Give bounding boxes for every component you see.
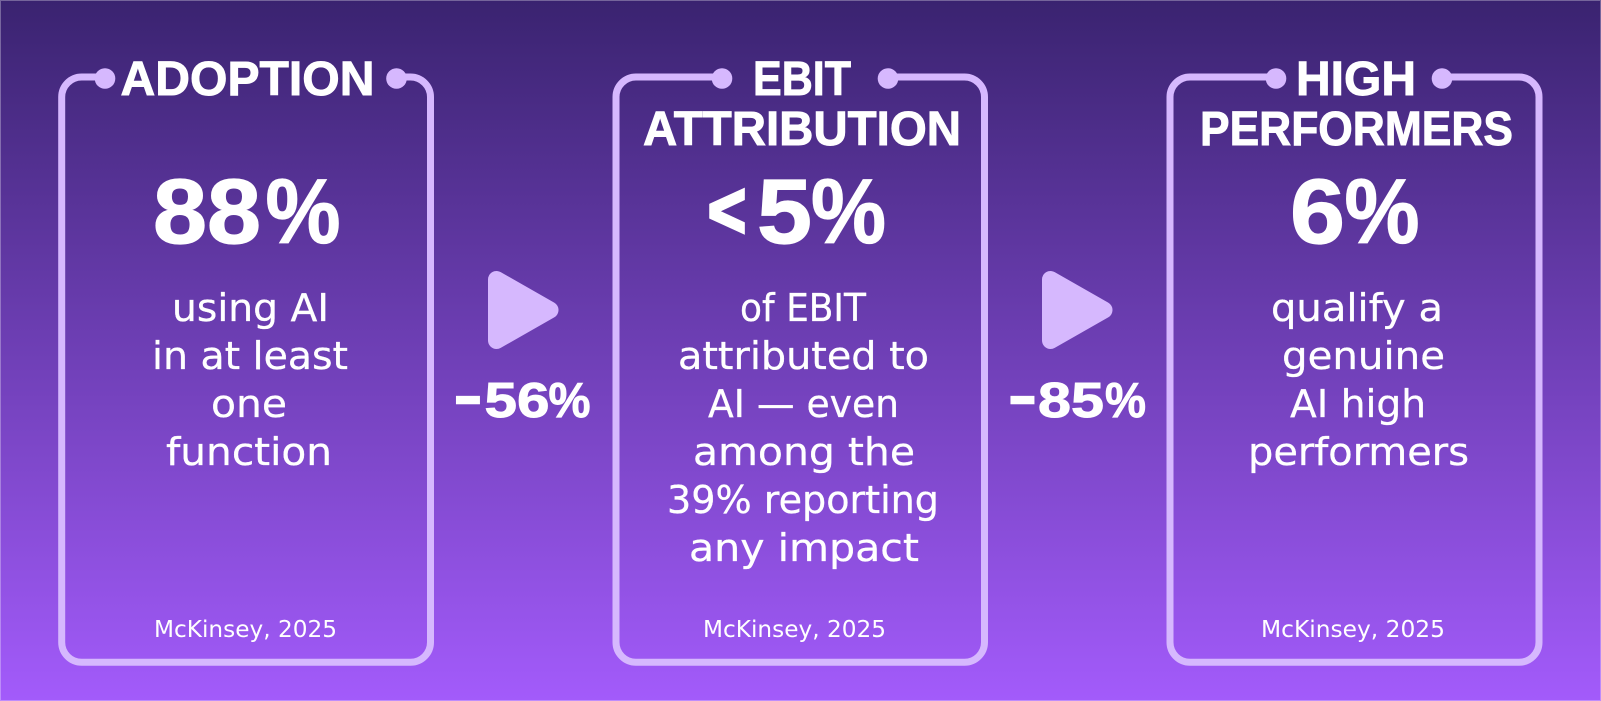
description: high performers: qualify a [1271,286,1443,330]
source: adoption: McKinsey, 2025 [154,617,337,643]
change: -56%: 56 [484,374,550,428]
panel: adoption [62,53,430,662]
heading: high performers [1200,53,1513,156]
panel frame: EBIT attribution [616,77,984,662]
arrow: adoption to EBIT [496,280,550,340]
description: EBIT attribution: among the [693,430,915,474]
change: -85%: % [1105,374,1146,428]
frame dot left [1266,68,1286,89]
description: adoption: in at least [152,334,348,378]
stat: <5%: < [708,166,746,254]
stat: <5% [708,161,886,263]
description: EBIT attribution: 39% reporting [667,478,939,522]
source: high performers: McKinsey, 2025 [1261,617,1445,643]
panel: high performers [1170,53,1539,662]
frame dot right [878,68,898,89]
description: adoption [152,286,348,474]
heading: EBIT attribution: ATTRIBUTION [643,103,961,156]
description: high performers: AI high [1290,382,1426,426]
stat: 88%: 88 [153,161,261,263]
frame dot left [95,68,115,89]
description: adoption: one [211,382,287,426]
heading: high performers: HIGH [1296,53,1416,106]
description: adoption: function [166,430,332,474]
frame dot left [712,68,732,89]
description: EBIT attribution: attributed to [678,334,929,378]
panel: EBIT attribution [616,53,984,662]
change: -56%: % [548,374,590,428]
description: EBIT attribution: of EBIT [740,286,867,330]
description: high performers: performers [1248,430,1469,474]
description: adoption: using AI [172,286,329,330]
description: high performers: genuine [1282,334,1445,378]
description: EBIT attribution: AI — even [708,382,899,426]
stat: 88%: % [266,161,340,263]
stat: 88% [153,161,340,263]
heading: EBIT attribution [643,53,961,156]
heading: EBIT attribution: EBIT [753,53,851,106]
stat: 6%: % [1344,161,1420,263]
stat: <5%: % [811,161,886,263]
change: -85% [1010,370,1146,428]
arrow: EBIT to high performers [1050,280,1104,340]
change: -85%: - [1010,370,1036,424]
panel frame: adoption [62,77,430,662]
frame dot right [1432,68,1452,89]
stat: 6% [1290,161,1420,263]
source: EBIT attribution: McKinsey, 2025 [703,617,886,643]
stat: 6%: 6 [1290,161,1345,263]
change: -56% [455,370,590,428]
description: high performers [1248,286,1469,474]
panel frame: high performers [1170,77,1539,662]
stat: <5%: 5 [757,161,812,263]
description: EBIT attribution: any impact [689,526,919,570]
heading: adoption: ADOPTION [120,53,374,106]
heading: high performers: PERFORMERS [1200,103,1513,156]
change: -56%: - [455,370,481,424]
frame dot right [386,68,407,89]
description: EBIT attribution [667,286,939,570]
change: -85%: 85 [1038,374,1104,428]
